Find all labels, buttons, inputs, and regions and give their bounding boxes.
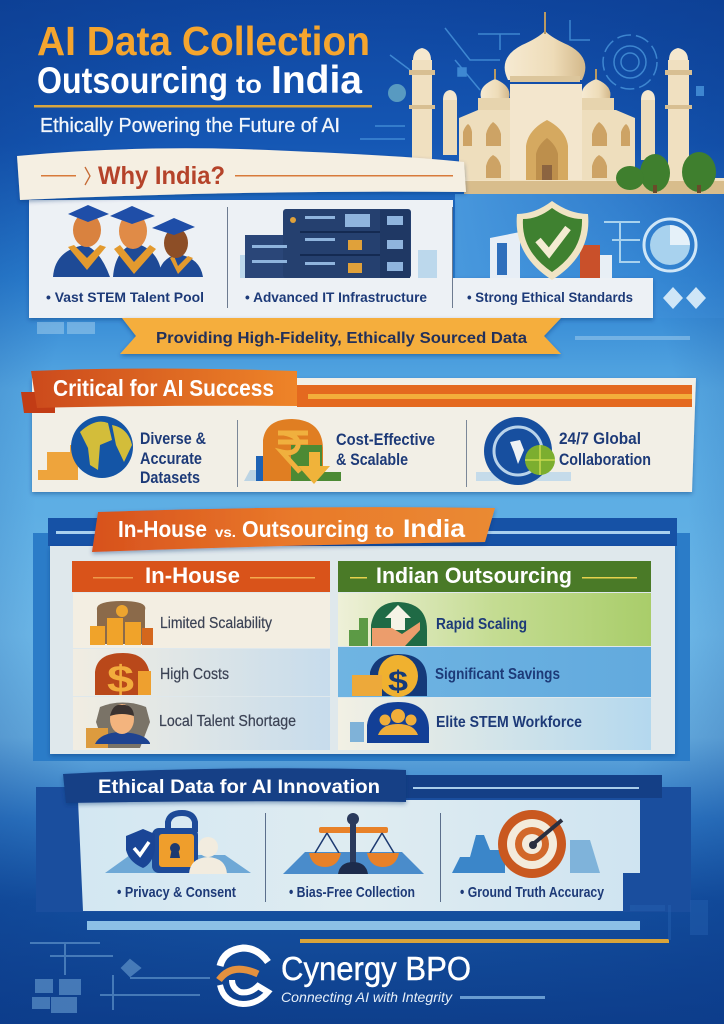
icon: shield and buildings: [490, 201, 612, 280]
panel body: [29, 200, 653, 318]
banner: high-fidelity data: [120, 318, 561, 354]
column: In-House: High Costs: [160, 666, 229, 683]
header ribbon: [17, 148, 466, 200]
icon: clock and small globe: [476, 417, 571, 485]
panel: Why India: • Strong Ethical Standards: [467, 289, 633, 305]
heading ribbon: India: [403, 515, 466, 543]
panel: Critical for AI Success: [21, 368, 696, 492]
panel: Critical for AI Success: & Scalable: [336, 450, 408, 469]
column: In-House: In-House: [145, 563, 240, 588]
heading ribbon: vs.: [215, 524, 236, 540]
gold accent line: [300, 939, 669, 943]
logo: Cynergy BPO: Cynergy BPO: [281, 950, 471, 987]
panel: Critical for AI Success: Cost-Effective: [336, 430, 435, 449]
icon: savings: [352, 654, 427, 698]
icon: servers: [240, 209, 437, 278]
banner: high-fidelity data: Providing High-Fidelity, Ethically Sourced Data: [156, 330, 527, 347]
pale squares decoration: [37, 322, 690, 340]
icon: logo mark: [219, 948, 268, 1004]
column: Indian Outsourcing: Significant Savings: [435, 666, 560, 683]
heading ribbon: [63, 768, 406, 803]
light bar under panel: [87, 921, 640, 930]
panel: Why India: • Advanced IT Infrastructure: [245, 289, 427, 305]
panel: In-House vs Outsourcing: [33, 507, 690, 761]
trees: [616, 152, 716, 193]
title: to: [236, 71, 262, 99]
heading ribbon: [21, 368, 297, 413]
panel: Ethical Data for AI Innovation: • Ground Truth Accuracy: [460, 884, 605, 901]
circuit chart decoration: [604, 219, 706, 309]
heading ribbon: Critical for AI Success: [53, 375, 274, 401]
heading ribbon: Outsourcing: [242, 516, 369, 542]
column: In-House: [72, 561, 330, 750]
heading ribbon: Ethical Data for AI Innovation: [98, 777, 380, 798]
header circuit decoration: [360, 20, 704, 139]
icon: coins: [90, 601, 153, 645]
icon: padlock privacy: [105, 813, 251, 874]
panel: Critical for AI Success: Datasets: [140, 468, 200, 487]
circuit decoration: bottom right: [630, 900, 708, 940]
column: In-House: Local Talent Shortage: [159, 713, 296, 730]
panel: Ethical Data for AI Innovation: • Bias-Free Collection: [289, 884, 415, 901]
title: [34, 18, 372, 137]
icon: person: [86, 702, 150, 748]
column: Indian Outsourcing: [338, 561, 651, 750]
column: In-House: Limited Scalability: [160, 615, 272, 632]
icon: rupee: [244, 419, 341, 484]
header ribbon: Why India?: [98, 162, 225, 190]
icon: scales: [283, 813, 424, 874]
panel: Critical for AI Success: 24/7 Global: [559, 429, 641, 448]
icon: graduates: [53, 205, 203, 277]
title: AI Data Collection: [37, 18, 370, 64]
column: Indian Outsourcing: Rapid Scaling: [436, 616, 527, 633]
icon: target: [452, 810, 600, 878]
panel: Ethical Data for AI Innovation: [36, 768, 691, 912]
heading ribbon: [92, 507, 495, 552]
icon: workforce: [350, 702, 429, 743]
panel: Critical for AI Success: Accurate: [140, 449, 202, 468]
illustration: Taj Mahal: [409, 12, 724, 194]
logo: Cynergy BPO: Connecting AI with Integrity: [281, 989, 453, 1005]
icon: savings: $: [388, 666, 408, 698]
circuit decoration: bottom left: [30, 943, 210, 1012]
panel: Ethical Data for AI Innovation: • Privacy & Consent: [117, 884, 236, 901]
panel: Critical for AI Success: Diverse &: [140, 429, 206, 448]
icon: dollar: $: [107, 659, 134, 701]
big left minaret: [409, 48, 435, 160]
panel: Why India: [17, 148, 724, 318]
title: Ethically Powering the Future of AI: [40, 115, 340, 137]
heading ribbon: In-House: [118, 516, 207, 542]
icon: globe: [38, 416, 133, 480]
labels: • Vast STEM Talent Pool: [46, 289, 204, 305]
panel: Critical for AI Success: Collaboration: [559, 450, 651, 469]
right blue area behind panel: [455, 194, 724, 318]
column: Indian Outsourcing: Elite STEM Workforce: [436, 714, 582, 731]
icon: dollar: [95, 653, 151, 701]
logo: Cynergy BPO: [219, 948, 545, 1005]
title: Outsourcing: [37, 60, 228, 101]
big right minaret: [665, 48, 692, 180]
icon: rapid scaling: [349, 602, 427, 646]
title: India: [271, 59, 362, 102]
column: Indian Outsourcing: Indian Outsourcing: [376, 563, 572, 588]
heading ribbon: to: [375, 521, 394, 541]
